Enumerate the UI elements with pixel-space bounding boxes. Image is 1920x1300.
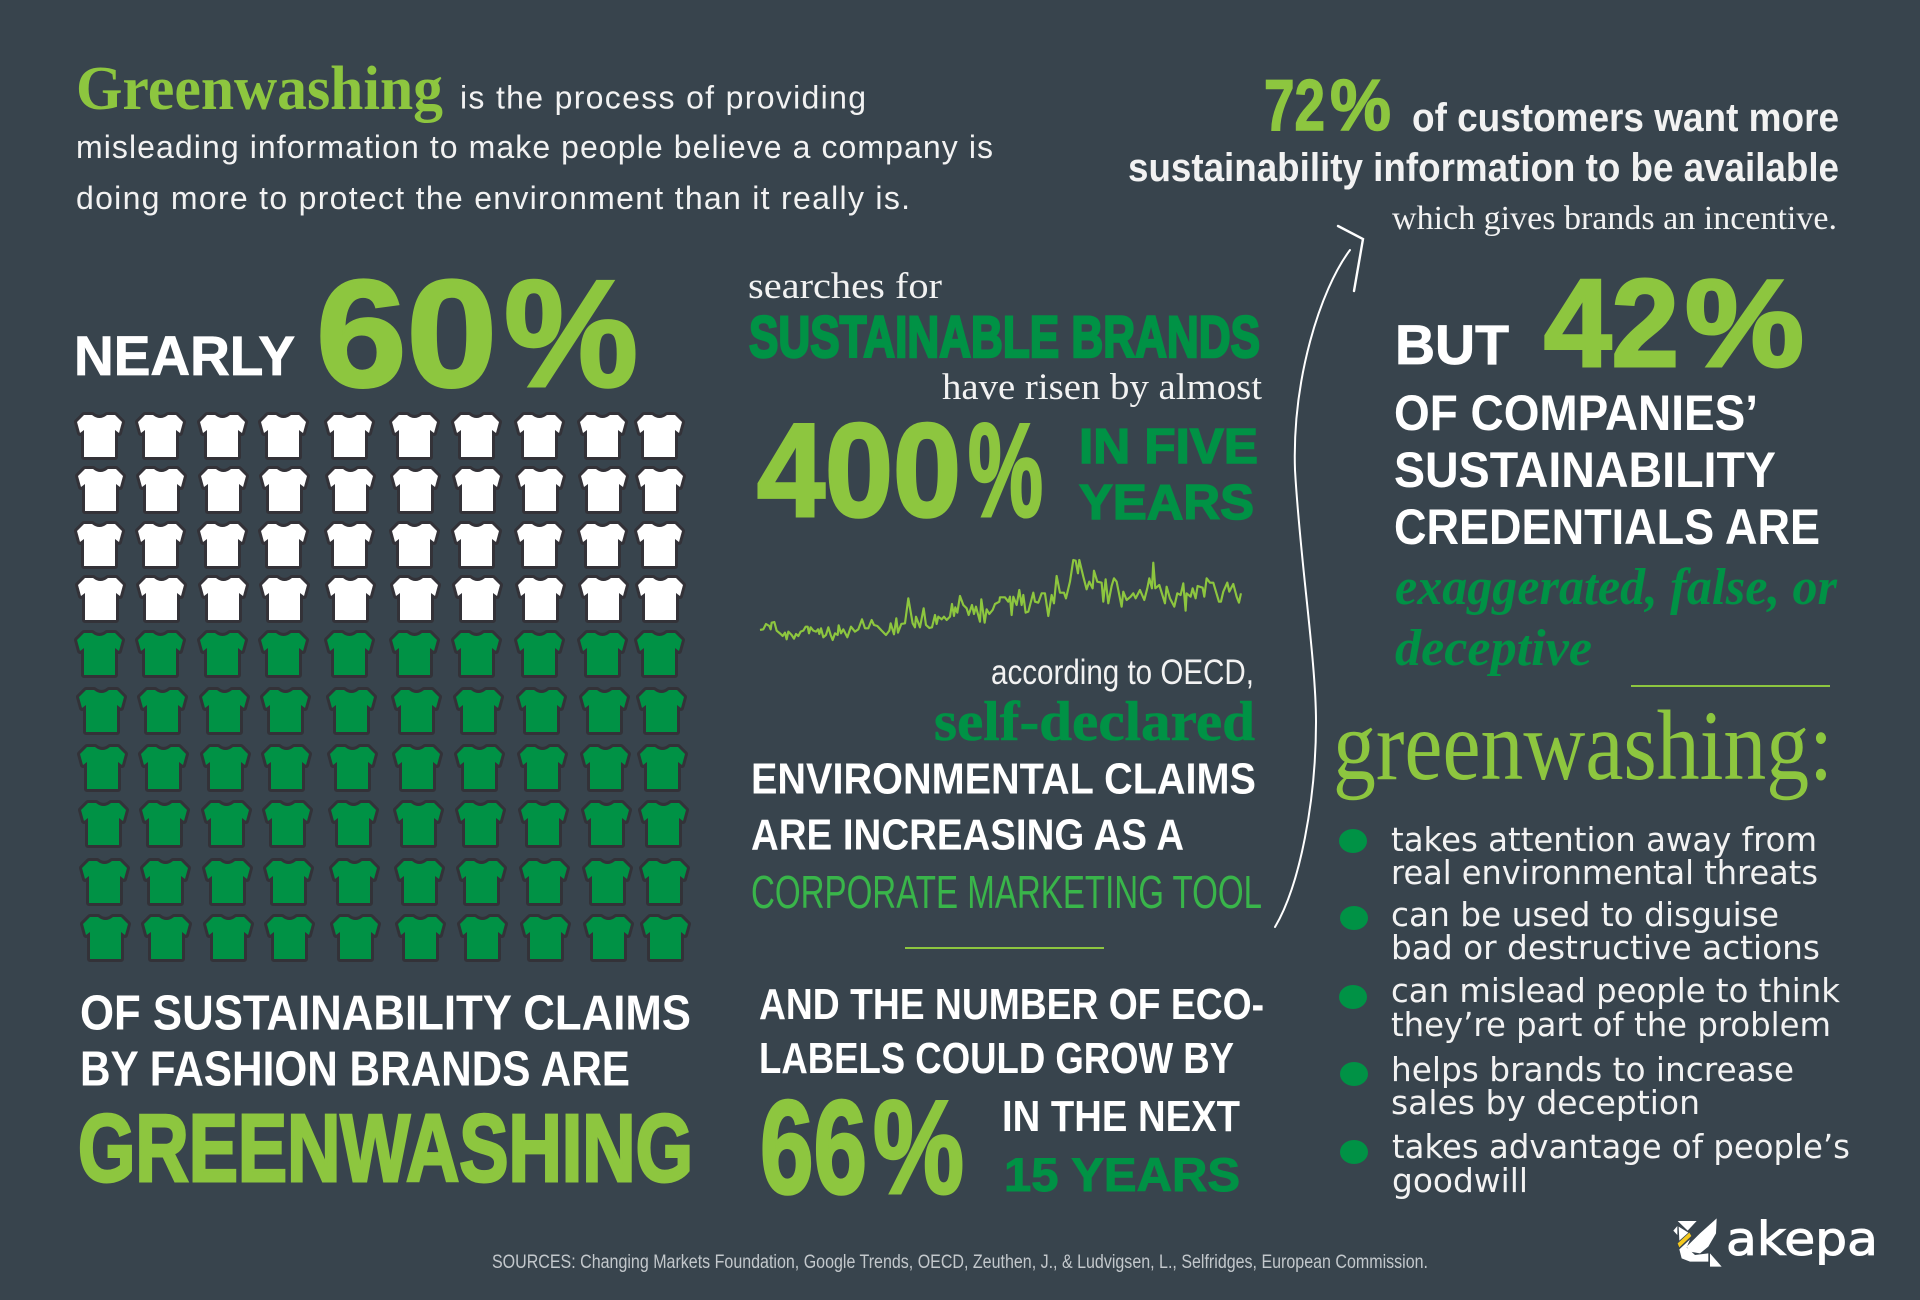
statement line 1: of customers want more xyxy=(1412,96,1839,140)
bullet text 1: takes attention away from xyxy=(1391,820,1817,859)
label: BUT: BUT xyxy=(1395,313,1509,376)
panel: 42 percent of companies xyxy=(1394,255,1838,677)
heading: SUSTAINABLE BRANDS: SUSTAINABLE BRANDS xyxy=(749,305,1260,370)
line chart: google trends search interest xyxy=(760,560,1241,640)
bullet text 3 continued: they’re part of the problem xyxy=(1391,1005,1831,1044)
highlighted word: GREENWASHING: GREENWASHING xyxy=(78,1095,693,1202)
highlight: self-declared: self-declared xyxy=(934,691,1255,753)
text: according to OECD: according to OECD, xyxy=(991,653,1254,692)
stat: 42% xyxy=(1544,255,1804,393)
72% customers statement xyxy=(1128,66,1839,237)
text: of companies: OF COMPANIES’ xyxy=(1394,385,1758,441)
sources line: SOURCES: Changing Markets Foundation, Google Trends, OECD, Zeuthen, J., & Ludvigsen, L., Selfridges, European Commission. xyxy=(492,1252,1428,1273)
stat: 60%: 60 xyxy=(316,249,497,419)
stat: 72%: 72 xyxy=(1264,66,1325,146)
bullet text 4: helps brands to increase xyxy=(1391,1050,1794,1089)
claim line 1: ENVIRONMENTAL CLAIMS xyxy=(751,754,1256,804)
panel: sustainable brand searches xyxy=(748,266,1263,640)
bullet text 5: takes advantage of people’s xyxy=(1392,1127,1850,1166)
bullet icon 3 xyxy=(1339,985,1367,1009)
intro definition text xyxy=(76,55,993,216)
statement line 3: which gives brands an incentive. xyxy=(1392,200,1837,237)
text line 1: AND THE NUMBER OF ECO- xyxy=(759,980,1264,1029)
bullet icon 1 xyxy=(1339,829,1367,853)
bullet text 4 continued: sales by deception xyxy=(1391,1083,1700,1122)
stat: 66%: 66 xyxy=(760,1074,867,1222)
text: sustainability: SUSTAINABILITY xyxy=(1394,442,1776,498)
stat: 72%: % xyxy=(1330,66,1391,146)
bullet text 3: can mislead people to think xyxy=(1391,971,1841,1010)
heading: Greenwashing: Greenwashing xyxy=(76,55,443,123)
stat: 400%: 400 xyxy=(757,397,961,545)
highlight: corporate marketing tool: CORPORATE MARKETING TOOL xyxy=(751,866,1262,918)
statement line 2: sustainability information to be available xyxy=(1128,146,1839,190)
caption line 1: OF SUSTAINABILITY CLAIMS xyxy=(80,986,691,1040)
icon: origami bird xyxy=(1673,1218,1722,1267)
label: YEARS: YEARS xyxy=(1079,476,1254,530)
definition line 2: misleading information to make people believe a company is xyxy=(76,129,993,165)
stat: 66%: % xyxy=(873,1074,964,1222)
definition line 1: is the process of providing xyxy=(460,80,866,116)
bullet text 5 continued: goodwill xyxy=(1392,1161,1528,1200)
highlight line 1: exaggerated, false, or xyxy=(1395,559,1838,616)
text: searches for: searches for xyxy=(748,266,942,307)
stat: 60% xyxy=(316,249,638,419)
label: NEARLY: NEARLY xyxy=(74,324,295,387)
text line 2: LABELS COULD GROW BY xyxy=(759,1034,1234,1083)
panel: what greenwashing does xyxy=(1333,690,1850,1200)
pictogram: 100 t-shirts, 40 white and 60 green xyxy=(77,415,688,959)
label: 15 YEARS: 15 YEARS xyxy=(1004,1148,1240,1201)
heading: greenwashing: greenwashing: xyxy=(1333,690,1833,801)
logo: akepa xyxy=(1673,1212,1878,1267)
stat: 42%: 42 xyxy=(1544,255,1679,393)
bullet icon 4 xyxy=(1340,1062,1368,1086)
bullet icon 5 xyxy=(1340,1140,1368,1164)
stat: 42%: % xyxy=(1685,255,1804,393)
label: IN FIVE: IN FIVE xyxy=(1079,420,1258,474)
caption line 2: BY FASHION BRANDS ARE xyxy=(80,1042,630,1096)
definition line 3: doing more to protect the environment than it really is. xyxy=(76,180,910,216)
highlight line 2: deceptive xyxy=(1395,620,1592,677)
wordmark: akepa xyxy=(1726,1212,1878,1266)
bullet text 2 continued: bad or destructive actions xyxy=(1391,928,1820,967)
text: have risen by almost: have risen by almost xyxy=(942,367,1263,408)
panel: nearly 60 percent of fashion claims xyxy=(74,249,693,1202)
stat: 72% xyxy=(1264,66,1391,146)
text: credentials are: CREDENTIALS ARE xyxy=(1394,499,1820,555)
panel: eco-labels growth xyxy=(759,980,1264,1222)
bullet icon 2 xyxy=(1340,906,1368,930)
bullet text 1 continued: real environmental threats xyxy=(1391,853,1818,892)
claim line 2: ARE INCREASING AS A xyxy=(751,810,1184,860)
stat: 60%: % xyxy=(504,249,638,419)
arrow: curved white arrow pointing to the top statement xyxy=(1275,226,1363,927)
label: IN THE NEXT: IN THE NEXT xyxy=(1002,1092,1240,1141)
bullet text 2: can be used to disguise xyxy=(1391,895,1779,934)
stat: 400%: % xyxy=(968,397,1043,545)
panel: self-declared environmental claims xyxy=(751,653,1262,918)
